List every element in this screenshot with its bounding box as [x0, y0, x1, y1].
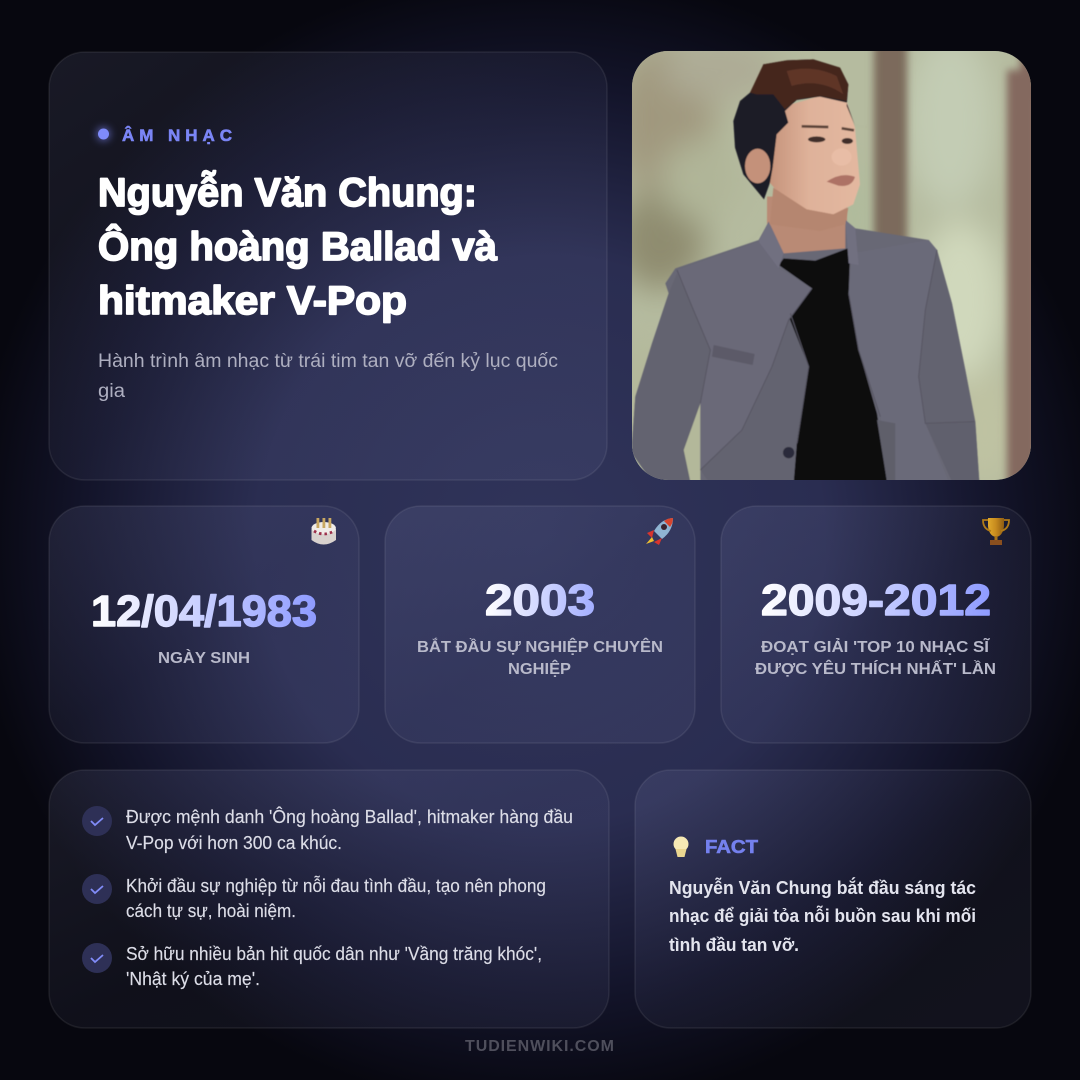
panel: title card — [49, 52, 607, 480]
stat label — [755, 636, 996, 678]
fact text: Nguyễn Văn Chung bắt đầu sáng tác — [669, 877, 976, 898]
list item 1 — [82, 806, 573, 853]
panel: stat birthday — [49, 506, 359, 743]
stat label: BẮT ĐẦU SỰ NGHIỆP CHUYÊN — [417, 637, 663, 656]
category tag: ÂM NHẠC — [122, 126, 232, 145]
head — [733, 59, 860, 231]
list item 2: cách tự sự, hoài niệm. — [126, 901, 296, 921]
fact text: tình đầu tan vỡ. — [669, 935, 799, 955]
fact heading: FACT — [705, 837, 758, 857]
title: Ông hoàng Ballad và — [98, 223, 498, 269]
footer brand: TUDIENWIKI.COM — [465, 1038, 614, 1055]
panel: stat award — [721, 506, 1031, 743]
title — [98, 169, 498, 323]
subtitle — [98, 351, 558, 402]
icon: light bulb — [674, 836, 688, 857]
title: Nguyễn Văn Chung: — [98, 169, 477, 215]
subtitle: gia — [98, 381, 125, 402]
list item 3: 'Nhật ký của mẹ'. — [126, 969, 260, 989]
icon: rocket — [646, 518, 673, 545]
title: hitmaker V-Pop — [98, 279, 407, 323]
list item 3: Sở hữu nhiều bản hit quốc dân như 'Vầng trăng khóc', — [126, 944, 542, 964]
icon: cake — [312, 518, 336, 544]
jacket — [632, 197, 979, 482]
stat label: ĐOẠT GIẢI 'TOP 10 NHẠC SĨ — [761, 636, 991, 656]
panel: fact — [635, 770, 1031, 1028]
ear — [745, 149, 770, 183]
fact text — [669, 877, 976, 955]
icon: trophy — [983, 518, 1009, 545]
list item 3 — [82, 943, 542, 989]
stat label — [417, 637, 663, 678]
neck — [766, 196, 848, 254]
stat label: NGÀY SINH — [158, 648, 250, 667]
subtitle: Hành trình âm nhạc từ trái tim tan vỡ đến kỷ lục quốc — [98, 351, 558, 372]
jacket shading — [632, 352, 700, 480]
list item 1: Được mệnh danh 'Ông hoàng Ballad', hitmaker hàng đầu — [126, 806, 573, 827]
stat value: 2003 — [485, 576, 595, 625]
stat value: 2009-2012 — [761, 576, 991, 625]
stat label: ĐƯỢC YÊU THÍCH NHẤT' LẦN — [755, 659, 996, 678]
shirt — [779, 247, 887, 482]
panel: stat career start — [385, 506, 695, 743]
fact text: nhạc để giải tỏa nỗi buồn sau khi mối — [669, 905, 976, 926]
list item 1: V-Pop với hơn 300 ca khúc. — [126, 833, 342, 853]
seams — [677, 250, 938, 470]
list item 2: Khởi đầu sự nghiệp từ nỗi đau tình đầu, tạo nên phong — [126, 875, 546, 896]
panel: highlights list — [49, 770, 609, 1028]
stat value: 12/04/1983 — [91, 587, 317, 636]
list item 2 — [82, 874, 546, 921]
photo: portrait in forest — [632, 51, 1031, 480]
stat label: NGHIỆP — [508, 659, 571, 678]
